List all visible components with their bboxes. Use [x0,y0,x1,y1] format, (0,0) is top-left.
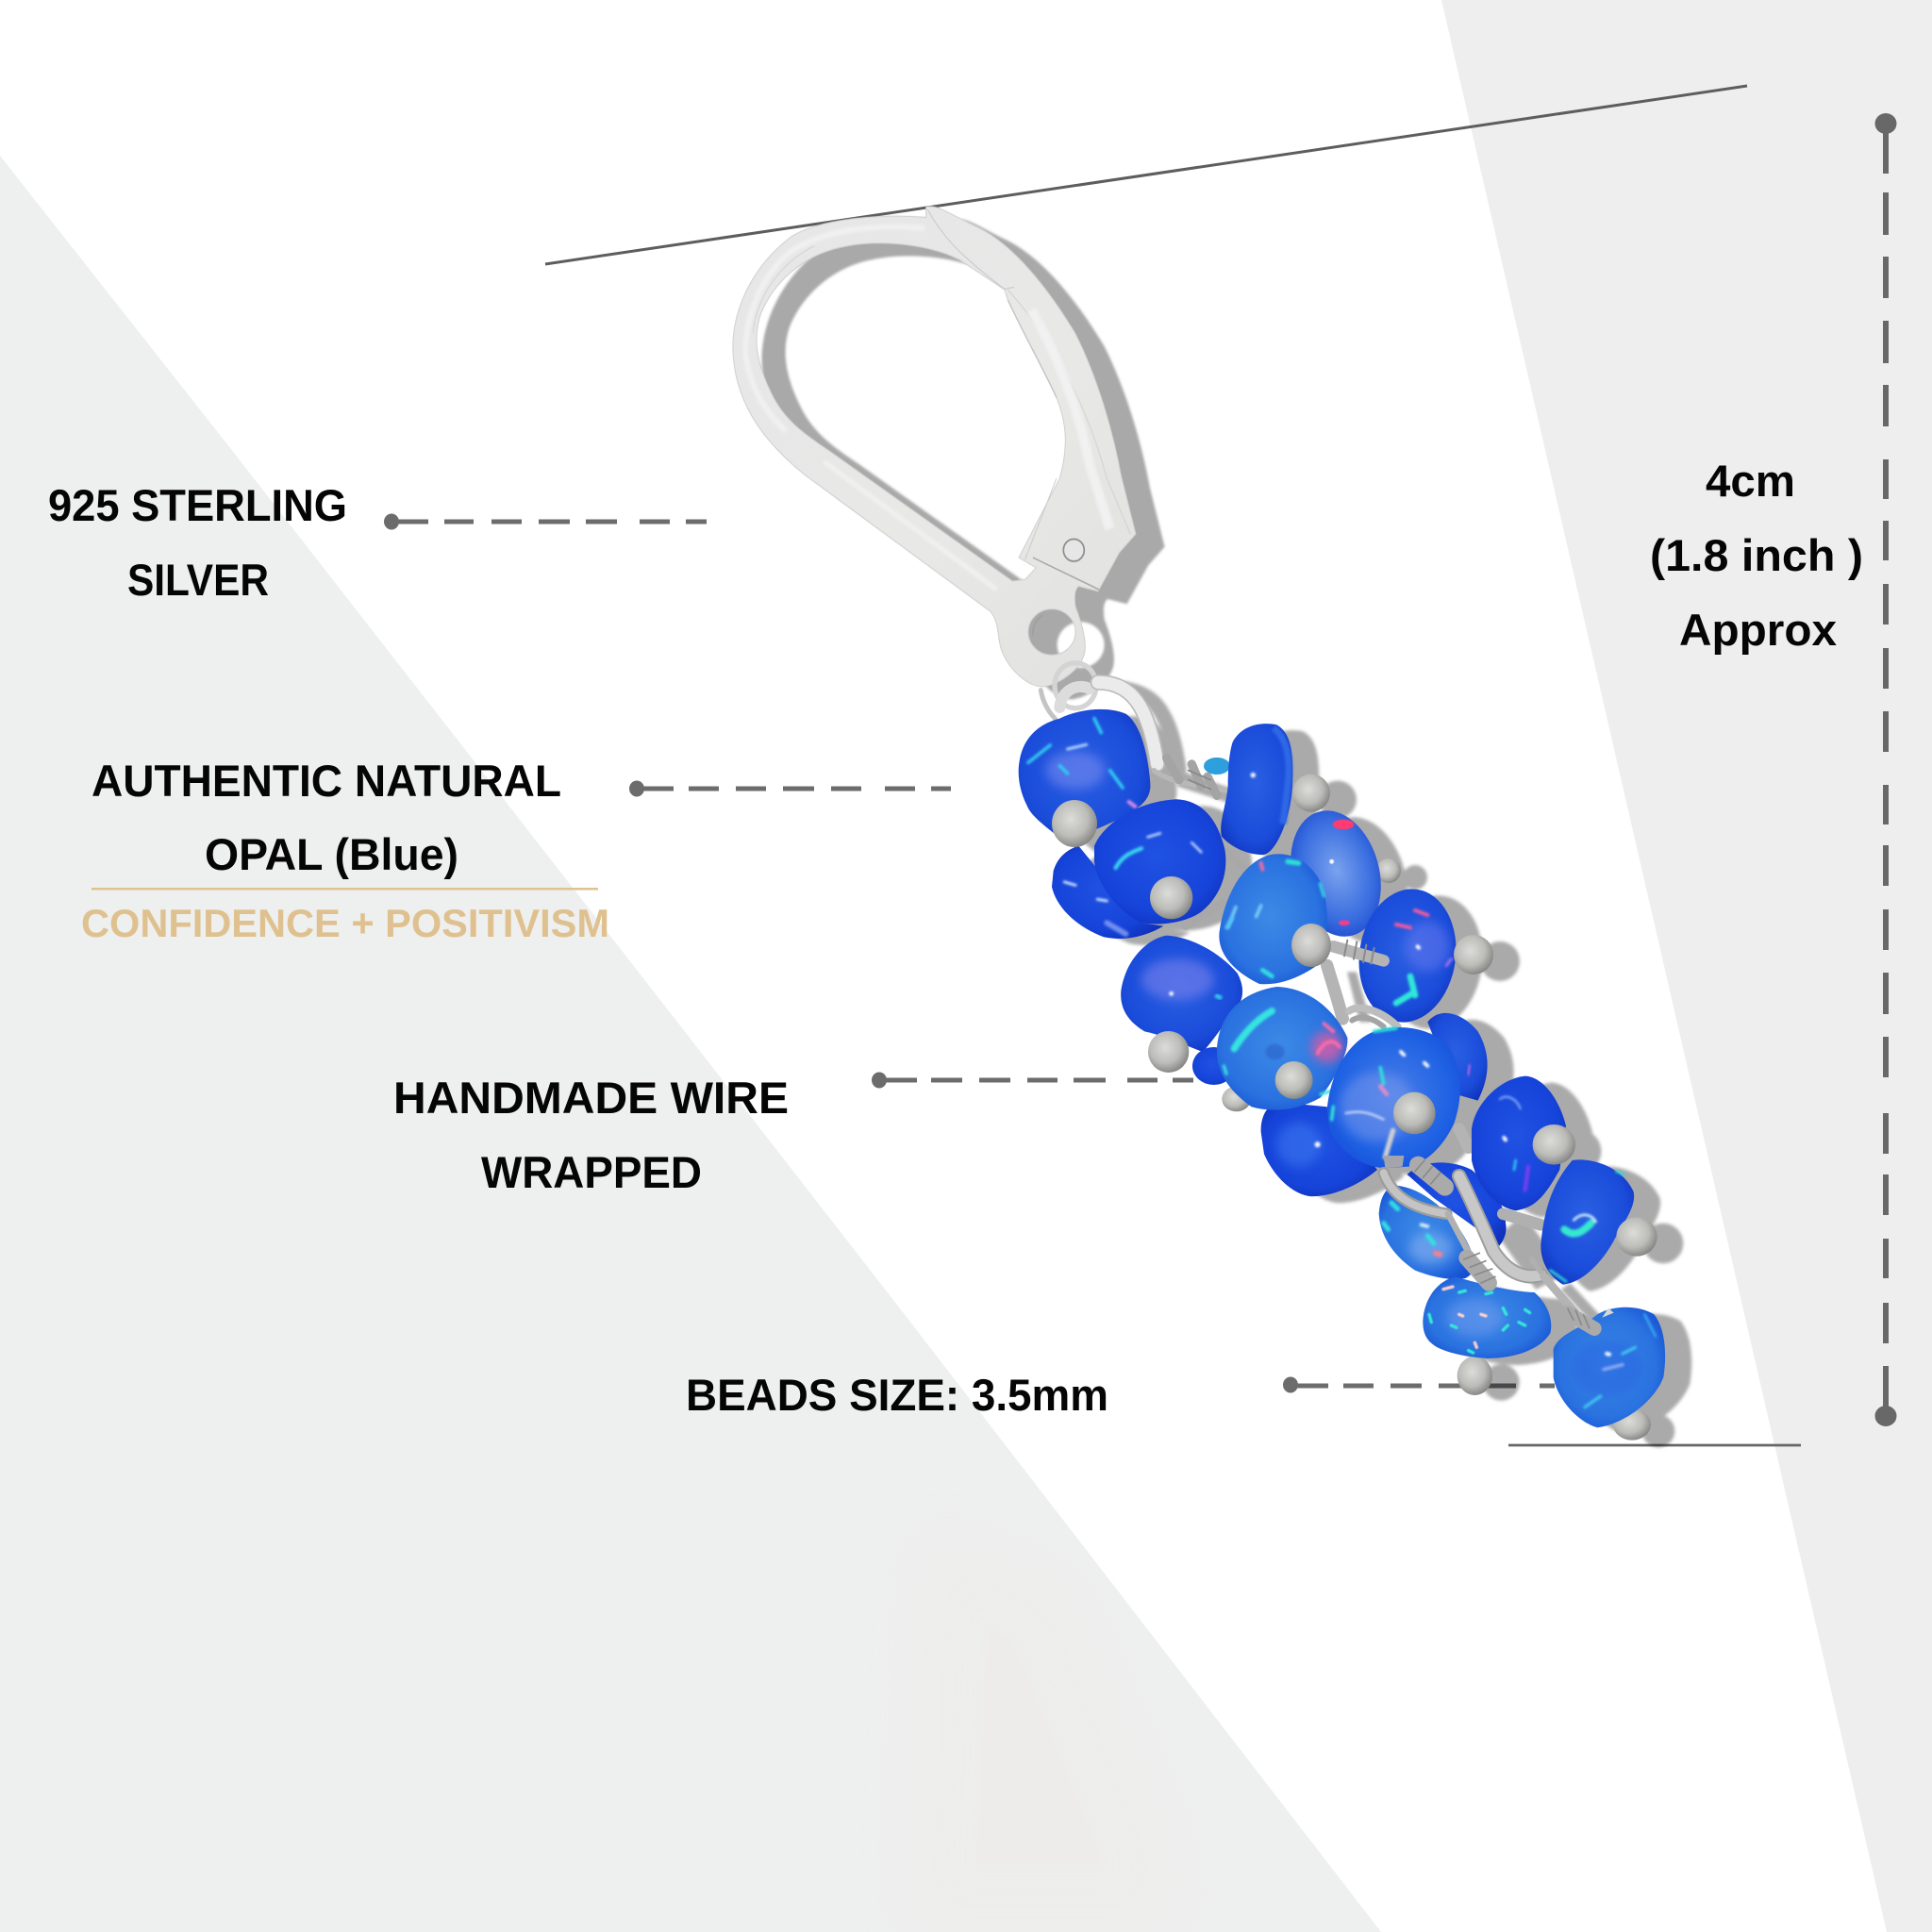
bead: deep behind loop [1407,1162,1507,1247]
panel: left grey wedge [0,156,1381,1932]
label: length 4cm: (1.8 inch ) [1650,530,1863,580]
label: bead size: BEADS SIZE: 3.5mm [686,1370,1108,1420]
measure line: bottom of earring [1508,1444,1801,1446]
silver ball: behind light bead [1376,858,1401,883]
bead: lower aqua opal [1379,1186,1474,1279]
clasp highlights [745,209,1130,636]
leader: bead size [1283,1377,1555,1392]
label: 925 sterling silver: SILVER [127,555,269,605]
jump rings and upper wire [1041,663,1247,926]
panel: right grey wedge [1441,0,1932,1932]
label: 925 sterling silver [48,480,347,605]
label: 925 sterling silver: 925 STERLING [48,480,347,530]
leader: sterling silver [384,513,707,530]
bead: light upper right opal [1277,800,1394,947]
bead: lower deep [1261,1102,1377,1196]
bead: speckled flat opal [1423,1276,1551,1395]
wire: hook and lower shaft [1459,1176,1575,1313]
label: handmade wire wrapped: WRAPPED [481,1147,702,1197]
bead: disc [1221,724,1330,855]
earring: opal bead cluster [1019,663,1665,1441]
bead: centre aqua [1219,854,1331,984]
shadow: lever-back clasp [762,220,1165,699]
label: authentic natural opal: OPAL (Blue) [205,829,458,879]
bead: second row opal [1094,799,1225,924]
leader: natural opal [629,781,951,796]
silver ball: bottom [1613,1408,1651,1441]
clasp pin [1063,539,1084,561]
wire: shaft and loop centre [1327,941,1398,1026]
label: length 4cm: 4cm [1706,456,1795,506]
measure line: top of earring [545,86,1747,264]
label: confidence + positivism: CONFIDENCE + POSITIVISM [81,901,609,945]
label: authentic natural opal [92,756,561,879]
bead: lower-right opal [1472,1076,1575,1210]
bead: right opal [1351,883,1493,1028]
dimension arrow: vertical dashed [1875,113,1896,1426]
bead: centre-left opal [1121,936,1242,1052]
clasp body [733,207,1136,687]
bead: big aqua with fire [1217,987,1347,1110]
label: length 4cm [1650,456,1863,655]
bead: triangular opal [1541,1159,1657,1285]
front wires and coils [1384,1129,1541,1261]
label: handmade wire wrapped: HANDMADE WIRE [393,1073,789,1123]
label: handmade wire wrapped [393,1073,789,1197]
bead: rear small [1148,1031,1251,1111]
silver ball: top-left [1052,800,1097,847]
bead: bottom opal [1554,1307,1665,1427]
label: authentic natural opal: AUTHENTIC NATURAL [92,756,561,806]
bead: rear left opal [1052,846,1163,939]
divider: tan rule [92,888,598,891]
leader: handmade wire [872,1072,1193,1089]
earring clasp: lever-back silver [733,207,1136,687]
bead: rear right [1427,1013,1488,1101]
bead: top-left opal [1019,709,1150,846]
label: length 4cm: Approx [1679,605,1837,655]
bead: glassy front opal [1327,1027,1460,1168]
bead: small turquoise behind [1204,758,1230,774]
shadow: beads [1045,681,1691,1447]
